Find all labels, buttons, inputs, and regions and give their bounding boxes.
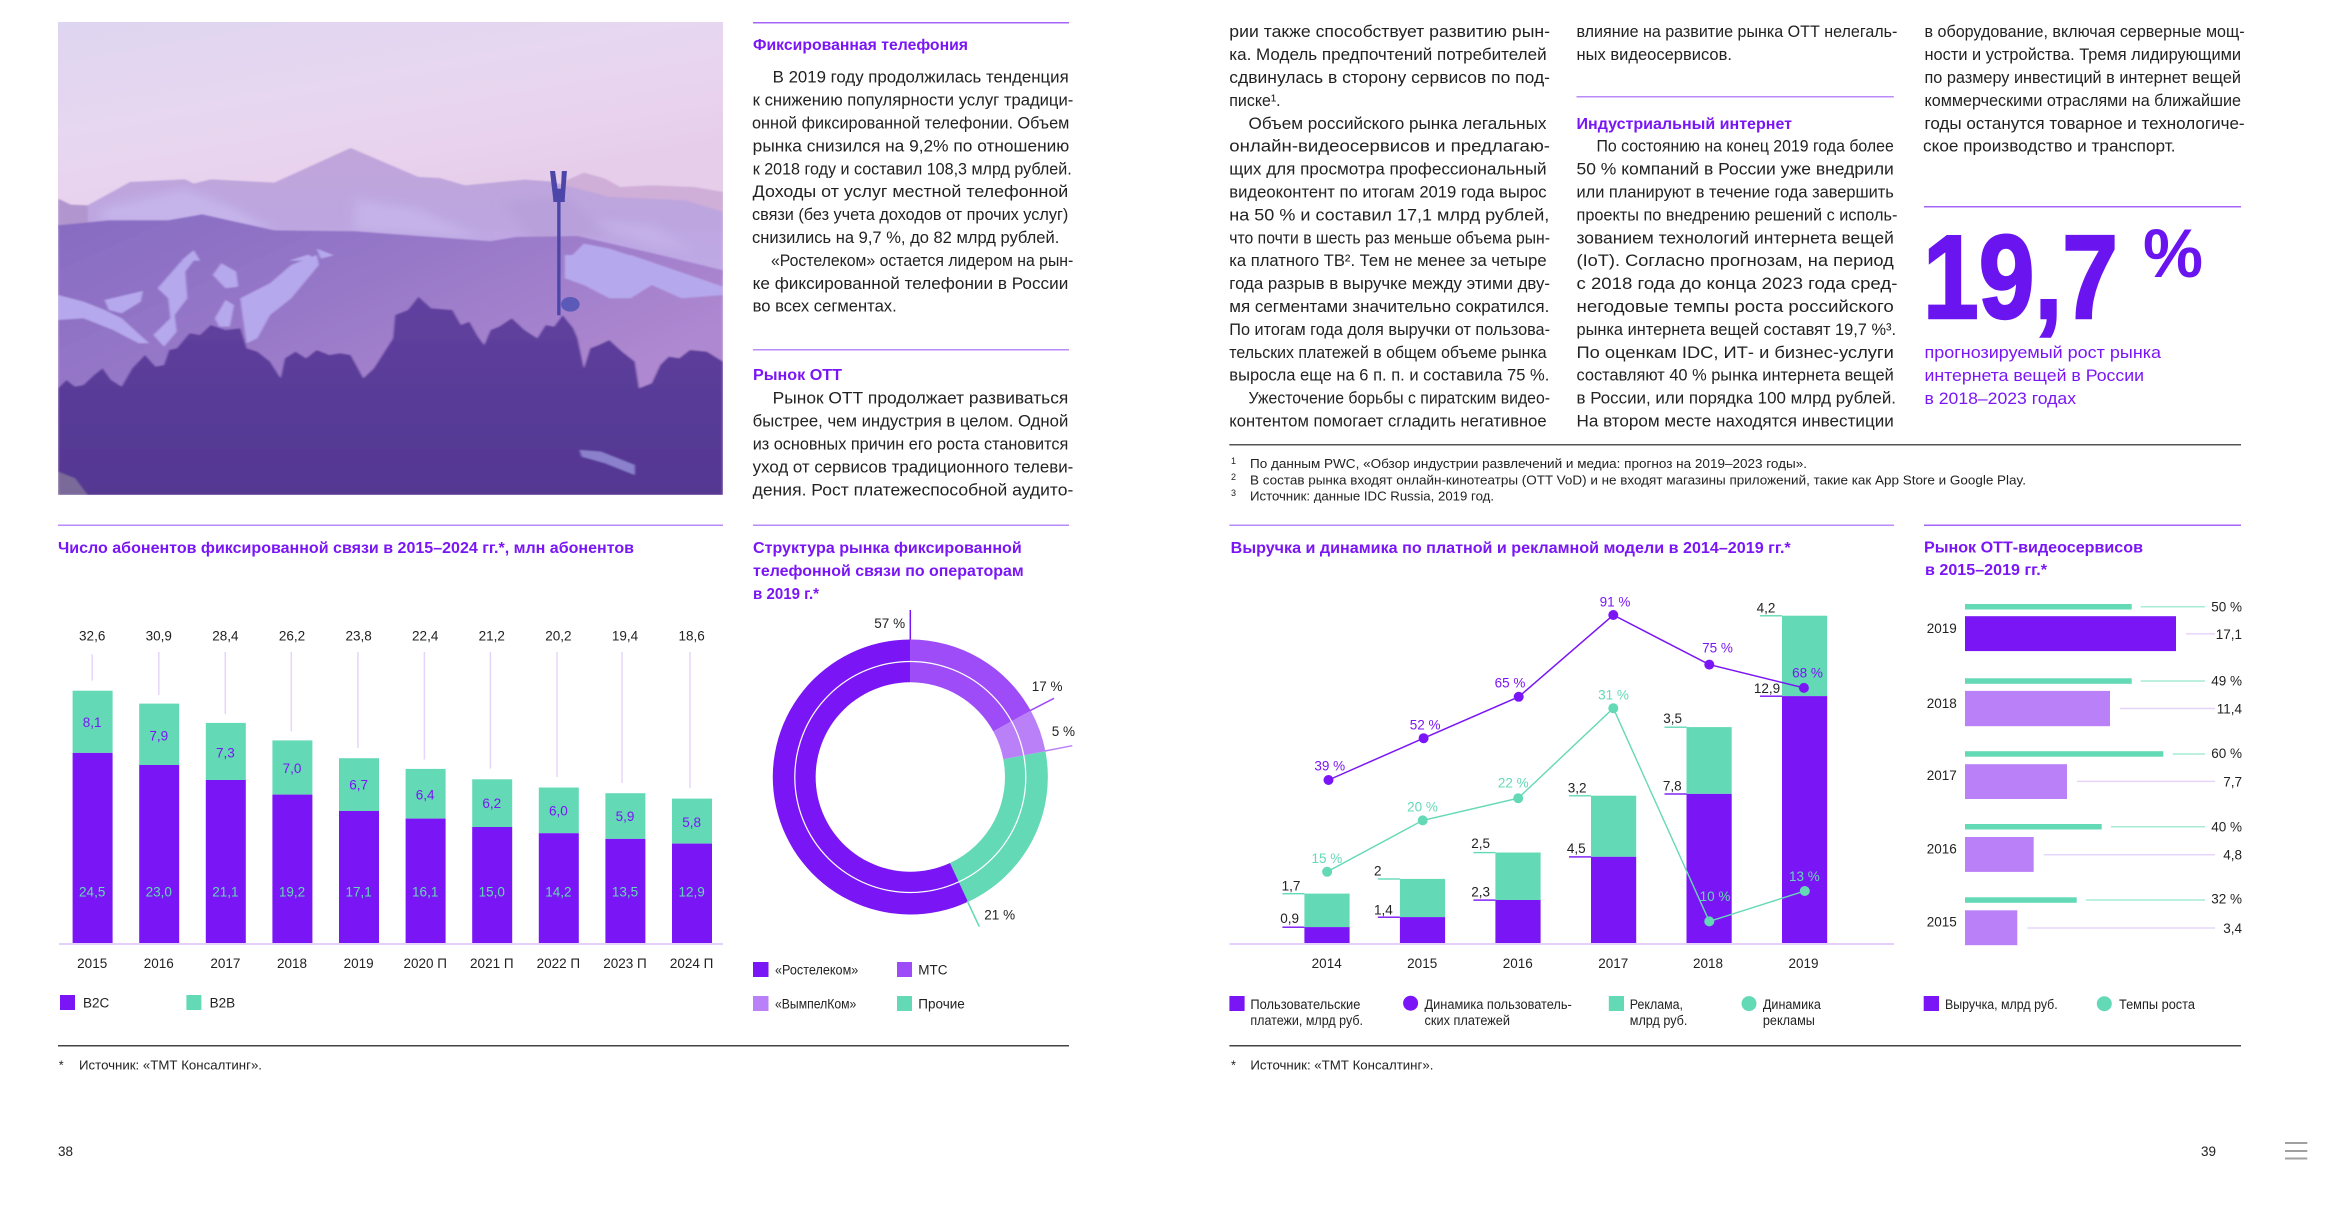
stacked bars: paid and ad revenue: 2 <box>1374 863 1382 878</box>
text block: fixed telephony body <box>752 69 1073 316</box>
text block: column 3: по размеру инвестиций в интернет вещей <box>1924 69 2241 87</box>
text block: column 3: ское производство и транспорт. <box>1923 138 2176 156</box>
donut chart: market share: 5 % <box>1052 724 1075 739</box>
text block: column 1: на 50 % и составил 17,1 млрд рублей, <box>1229 206 1549 224</box>
stacked bars: paid and ad revenue: 1,4 <box>1374 902 1393 917</box>
axis years: 2015 <box>1407 956 1437 971</box>
line chart: ad revenue dynamics: 13 % <box>1789 869 1820 884</box>
text block: column 1: Ужесточение борьбы с пиратским видео- <box>1248 390 1550 408</box>
bar chart: revenue and growth <box>1927 600 2242 945</box>
stacked bar chart: subscribers: 2017 <box>210 956 240 971</box>
text block: column 1: ка. Модель предпочтений потребителей <box>1229 46 1547 64</box>
stacked bar chart: subscribers: 2015 <box>77 956 107 971</box>
stacked bar chart: subscribers: 5,9 <box>616 809 634 824</box>
stacked bar chart: subscribers: 7,3 <box>216 746 235 760</box>
text block: column 1: видеоконтент по итогам 2019 года вырос <box>1229 184 1547 202</box>
stacked bar chart: subscribers: 2022 П <box>537 956 580 971</box>
text block: fixed telephony body: связи (без учета доходов от прочих услуг) <box>752 206 1068 224</box>
axis years <box>1312 956 1819 971</box>
text block: fixed telephony body: ке фиксированной телефонии в России <box>753 275 1068 293</box>
bar chart: revenue and growth: 49 % <box>2211 673 2242 688</box>
stacked bar chart: subscribers: 13,5 <box>612 884 638 899</box>
panel: fixed line subscribers chart <box>58 524 723 1010</box>
text block: column 2 top: ных видеосервисов. <box>1576 46 1732 64</box>
legend: revenue chart: млрд руб. <box>1630 1013 1687 1028</box>
source note: right page: * <box>1231 1058 1236 1072</box>
text block: fixed telephony body: к 2018 году и составил 108,3 млрд рублей. <box>753 160 1072 178</box>
legend: revenue chart: Динамика <box>1763 997 1821 1012</box>
text block: column 1: По итогам года доля выручки от пользова- <box>1229 321 1550 339</box>
donut chart: market share: 17 % <box>1032 679 1062 694</box>
stacked bar chart: subscribers: 2020 П <box>403 956 447 971</box>
legend: revenue chart: ских платежей <box>1424 1013 1510 1028</box>
text block: footnotes: По данным PWC, «Обзор индустрии развлечений и медиа: прогноз на 2019–2023 годы». <box>1250 457 1807 471</box>
text block: fixed telephony body: «Ростелеком» остается лидером на рын- <box>771 252 1073 270</box>
stacked bar chart: subscribers: 8,1 <box>83 715 102 730</box>
text block: column 2 body: проекты по внедрению решений с исполь- <box>1576 206 1897 224</box>
axis years: 2014 <box>1312 956 1342 971</box>
stacked bar chart: subscribers: 28,4 <box>212 628 239 643</box>
text block: column 3: коммерческими отраслями на ближайшие <box>1924 92 2241 110</box>
text block: column 2 top: влияние на развитие рынка ОТТ нелегаль- <box>1576 23 1897 41</box>
line chart: paid revenue dynamics: 52 % <box>1410 717 1440 732</box>
panel: operator structure donut <box>753 524 1075 1012</box>
stacked bar chart: subscribers: 23,8 <box>345 628 372 643</box>
stacked bar chart: subscribers: 7,0 <box>283 761 301 776</box>
bar chart: revenue and growth: 3,4 <box>2223 921 2242 936</box>
page number 38: 38 <box>58 1144 73 1159</box>
text block: fixed telephony body: В 2019 году продолжилась тенденция <box>773 69 1069 87</box>
text block: OTT market body: из основных причин его роста становится <box>753 436 1068 454</box>
text block: callout caption: прогнозируемый рост рынка <box>1924 344 2162 362</box>
stacked bar chart: subscribers: 2018 <box>277 956 307 971</box>
line chart: ad revenue dynamics: 15 % <box>1312 851 1342 866</box>
heading: revenue chart title: Выручка и динамика по платной и рекламной модели в 2014–2019 гг.* <box>1231 540 1791 557</box>
bar chart: revenue and growth: 7,7 <box>2223 774 2242 789</box>
line chart: paid revenue dynamics <box>1314 594 1823 785</box>
text block: column 1: мя сегментами значительно сократился. <box>1229 298 1549 316</box>
bar chart: revenue and growth: 2019 <box>1927 621 1957 636</box>
text block: column 1: сдвинулась в сторону сервисов по под- <box>1229 69 1550 87</box>
stacked bar chart: subscribers: 6,2 <box>482 796 501 811</box>
stacked bars: paid and ad revenue: 4,5 <box>1567 841 1586 856</box>
bar chart: revenue and growth: 11,4 <box>2217 702 2242 716</box>
stacked bar chart: subscribers: 17,1 <box>345 884 372 899</box>
line chart: paid revenue dynamics: 91 % <box>1600 594 1630 609</box>
stacked bar chart: subscribers: 14,2 <box>545 884 572 899</box>
line chart: ad revenue dynamics: 22 % <box>1498 776 1529 790</box>
donut chart: market share: 57 % <box>874 616 905 631</box>
donut chart: market share <box>773 610 1075 927</box>
text block: fixed telephony body: снизились на 9,7 %, до 82 млрд рублей. <box>752 229 1059 247</box>
heading: donut title <box>753 540 1024 603</box>
legend: operators: «ВымпелКом» <box>775 997 856 1012</box>
text block: fixed telephony body: во всех сегментах. <box>753 298 897 316</box>
line chart: ad revenue dynamics: 10 % <box>1700 889 1730 904</box>
heading: OTT chart title: Рынок ОТТ-видеосервисов <box>1924 540 2143 556</box>
text block: OTT market body: Рынок ОТТ продолжает развиваться <box>773 390 1068 408</box>
text block: footnotes: Источник: данные IDC Russia, 2019 год. <box>1250 490 1494 504</box>
legend: OTT chart: Темпы роста <box>2119 997 2195 1012</box>
heading: OTT chart title <box>1924 540 2143 579</box>
text block: OTT market body: дения. Рост платежеспособной аудито- <box>753 481 1073 499</box>
icon: telecom tower <box>550 171 580 315</box>
stacked bar chart: subscribers: 5,8 <box>682 815 701 830</box>
stacked bars: paid and ad revenue: 4,2 <box>1757 600 1775 616</box>
line chart: ad revenue dynamics <box>1312 687 1820 926</box>
donut chart: market share: 21 % <box>984 907 1015 922</box>
trees silhouette <box>58 297 723 495</box>
text block: column 1: щих для просмотра профессиональный <box>1229 161 1547 179</box>
stacked bar chart: subscribers: 16,1 <box>412 884 438 899</box>
stacked bars: paid and ad revenue: 12,9 <box>1754 681 1780 696</box>
text block: column 2 body: По состоянию на конец 2019 года более <box>1596 138 1894 156</box>
text block: footnotes: 1 <box>1231 456 1236 466</box>
line chart: paid revenue dynamics: 65 % <box>1495 676 1525 690</box>
text block: column 1: выросла еще на 6 п. п. и составила 75 %. <box>1229 367 1549 385</box>
stacked bar chart: subscribers: 2024 П <box>670 956 713 971</box>
heading: subscribers chart title: Число абонентов фиксированной связи в 2015–2024 гг.*, млн абонентов <box>58 540 634 557</box>
line chart: paid revenue dynamics: 75 % <box>1702 640 1733 656</box>
text block: column 2 top <box>1576 23 1897 64</box>
text block: fixed telephony body: к снижению популярности услуг традици- <box>753 92 1073 110</box>
source note: right page: Источник: «ТМТ Консалтинг». <box>1250 1058 1433 1072</box>
stacked bars: paid and ad revenue <box>1229 600 1894 945</box>
bar chart: revenue and growth: 4,8 <box>2223 848 2242 863</box>
stacked bar chart: subscribers: 30,9 <box>146 628 172 643</box>
heading: donut title: в 2019 г.* <box>753 586 820 603</box>
stacked bars: paid and ad revenue: 1,7 <box>1282 879 1300 894</box>
axis years: 2018 <box>1693 956 1723 971</box>
heading: OTT market: Рынок ОТТ <box>753 367 842 384</box>
text block: fixed telephony body: онной фиксированной телефонии. Объем <box>752 114 1069 132</box>
text block: footnotes: 2 <box>1231 472 1236 482</box>
stacked bar chart: subscribers: 26,2 <box>279 628 305 643</box>
text block: fixed telephony body: Доходы от услуг местной телефонной <box>753 183 1068 201</box>
bar chart: revenue and growth: 2016 <box>1927 842 1957 856</box>
source note: right page <box>1229 1045 2241 1072</box>
text block: column 1: года разрыв в выручке между этими дву- <box>1229 275 1550 293</box>
source note: left page: * <box>59 1058 64 1072</box>
callout: 19,7 %: 19,7 <box>1923 211 2118 344</box>
panel: photo of mountains with telecom tower <box>58 22 723 495</box>
text block: column 1: писке¹. <box>1229 92 1281 110</box>
bar chart: revenue and growth: 2018 <box>1927 696 1957 711</box>
text block: column 2 body: или планируют в течение года завершить <box>1576 184 1894 202</box>
stacked bar chart: subscribers: 7,9 <box>149 728 168 743</box>
bar chart: revenue and growth: 2017 <box>1927 768 1957 783</box>
legend: operators: Прочие <box>918 997 965 1012</box>
text block: column 2 body: По оценкам IDC, ИТ- и бизнес-услуги <box>1576 344 1894 362</box>
text block: column 2 body: рынка интернета вещей составят 19,7 %³. <box>1576 321 1896 339</box>
stacked bar chart: subscribers: 12,9 <box>678 884 705 899</box>
line chart: paid revenue dynamics: 68 % <box>1792 666 1823 680</box>
stacked bar chart: subscribers: 21,2 <box>479 628 505 643</box>
text block: column 3: годы останутся товарное и технологиче- <box>1924 115 2245 133</box>
stacked bar chart: subscribers: 23,0 <box>146 884 172 899</box>
text block: column 2 body: с 2018 года до конца 2023 года сред- <box>1576 275 1897 293</box>
stacked bar chart: subscribers: 6,4 <box>416 787 435 802</box>
legend: OTT chart <box>1924 996 2195 1012</box>
legend: operators <box>753 962 965 1012</box>
text block: column 3: в оборудование, включая серверные мощ- <box>1924 23 2245 41</box>
panel: fixed telephony text <box>752 22 1073 499</box>
axis years: 2019 <box>1788 956 1819 971</box>
text block: column 2 body: (IoT). Согласно прогнозам, на период <box>1576 252 1894 270</box>
text block: column 3: ности и устройства. Тремя лидирующими <box>1924 46 2241 64</box>
stacked bar chart: subscribers: 15,0 <box>479 884 505 899</box>
panel: revenue and dynamics chart <box>1229 524 1894 1028</box>
heading: fixed telephony: Фиксированная телефония <box>753 37 968 54</box>
text block: OTT market body: уход от сервисов традиционного телеви- <box>753 458 1073 476</box>
stacked bar chart: subscribers: 19,4 <box>612 628 639 643</box>
line chart: ad revenue dynamics: 31 % <box>1598 687 1629 702</box>
legend: operators: «Ростелеком» <box>775 963 858 978</box>
text block: column 2 body: составляют 40 % рынка интернета вещей <box>1576 367 1894 385</box>
stacked bar chart: subscribers: 2016 <box>144 956 174 971</box>
text block: column 1: контентом помогает сгладить негативное <box>1229 412 1547 430</box>
legend: revenue chart: платежи, млрд руб. <box>1250 1013 1363 1028</box>
legend: revenue chart: рекламы <box>1763 1013 1815 1028</box>
text block: footnotes: 3 <box>1231 488 1236 498</box>
text block: column 1: Объем российского рынка легальных <box>1248 115 1547 133</box>
text block: column 3 <box>1923 23 2245 156</box>
bar chart: revenue and growth: 50 % <box>2211 600 2242 614</box>
text block: footnotes <box>1231 456 2026 504</box>
legend: revenue chart: Пользовательские <box>1250 997 1360 1012</box>
stacked bars: paid and ad revenue: 3,2 <box>1568 780 1587 796</box>
text block: callout caption <box>1924 344 2162 408</box>
axis years: 2017 <box>1598 956 1628 971</box>
bar chart: revenue and growth: 32 % <box>2211 891 2242 906</box>
text block: column 1: что почти в шесть раз меньше объема рын- <box>1229 229 1550 247</box>
stacked bars: paid and ad revenue: 7,8 <box>1663 779 1682 794</box>
text block: column 1: рии также способствует развитию рын- <box>1229 23 1550 41</box>
text block: column 1: ка платного ТВ². Тем не менее за четыре <box>1229 252 1547 270</box>
stacked bars: paid and ad revenue: 3,5 <box>1663 711 1682 726</box>
source note: left page: Источник: «ТМТ Консалтинг». <box>79 1058 262 1072</box>
stacked bars: paid and ad revenue: 2,3 <box>1471 884 1490 899</box>
heading: donut title: телефонной связи по операторам <box>753 563 1024 580</box>
text block: column 2 body <box>1576 138 1897 430</box>
legend: B2C and B2B: B2C <box>83 996 110 1010</box>
stacked bars: paid and ad revenue: 0,9 <box>1280 911 1299 926</box>
stacked bar chart: subscribers: 24,5 <box>79 884 105 899</box>
stacked bar chart: subscribers: 21,1 <box>212 884 239 899</box>
text block: column 2 body: зованием технологий интернета вещей <box>1576 229 1894 247</box>
callout: 19,7 %: % <box>2143 215 2203 292</box>
heading: OTT chart title: в 2015–2019 гг.* <box>1925 562 2048 579</box>
legend: revenue chart: Динамика пользователь- <box>1424 997 1572 1012</box>
text block: column 1: тельских платежей в общем объеме рынка <box>1229 344 1547 362</box>
heading: industrial internet: Индустриальный интернет <box>1576 116 1792 133</box>
text block: column 1 <box>1229 23 1550 430</box>
stacked bar chart: subscribers <box>59 628 723 971</box>
panel: OTT video services chart <box>1924 524 2242 1012</box>
stacked bar chart: subscribers: 6,0 <box>549 803 568 818</box>
text block: callout caption: в 2018–2023 годах <box>1924 390 2077 408</box>
legend: OTT chart: Выручка, млрд руб. <box>1945 997 2058 1012</box>
bar chart: revenue and growth: 60 % <box>2211 746 2242 761</box>
legend: revenue chart: Реклама, <box>1630 997 1683 1012</box>
bar chart: revenue and growth: 17,1 <box>2216 627 2242 642</box>
source note: left page <box>58 1045 1069 1072</box>
text block: column 2 body: в России, или порядка 100 млрд рублей. <box>1576 390 1896 408</box>
stacked bars: paid and ad revenue: 2,5 <box>1471 836 1490 851</box>
page number 39: 39 <box>2201 1144 2216 1159</box>
stacked bar chart: subscribers: 20,2 <box>545 628 572 643</box>
stacked bar chart: subscribers: 2023 П <box>603 956 647 971</box>
stacked bar chart: subscribers: 18,6 <box>678 628 705 643</box>
stacked bar chart: subscribers: 22,4 <box>412 628 439 643</box>
bar chart: revenue and growth: 2015 <box>1927 914 1957 929</box>
text block: column 1: онлайн-видеосервисов и предлагаю- <box>1229 138 1550 156</box>
line chart: paid revenue dynamics: 39 % <box>1314 758 1345 773</box>
text block: column 2 body: негодовые темпы роста российского <box>1576 298 1894 316</box>
heading: donut title: Структура рынка фиксированной <box>753 540 1022 557</box>
text block: column 2 body: На втором месте находятся инвестиции <box>1576 412 1894 430</box>
axis years: 2016 <box>1503 956 1533 971</box>
legend: B2C and B2B <box>60 995 235 1010</box>
icon: menu <box>2285 1142 2307 1160</box>
panel: right page text columns <box>1229 23 2245 503</box>
legend: revenue chart <box>1229 996 1821 1028</box>
text block: column 2 body: 50 % компаний в России уже внедрили <box>1576 161 1894 179</box>
legend: B2C and B2B: B2B <box>210 996 235 1010</box>
stacked bar chart: subscribers: 2021 П <box>470 956 514 971</box>
stacked bar chart: subscribers: 32,6 <box>79 628 105 643</box>
text block: OTT market body <box>753 390 1073 499</box>
line chart: ad revenue dynamics: 20 % <box>1407 799 1438 814</box>
stacked bar chart: subscribers: 19,2 <box>279 884 305 899</box>
text block: fixed telephony body: рынка снизился на 9,2% по отношению <box>753 137 1069 155</box>
text block: OTT market body: быстрее, чем индустрия в целом. Одной <box>753 413 1068 431</box>
stacked bar chart: subscribers: 2019 <box>344 956 374 971</box>
legend: operators: МТС <box>918 963 948 978</box>
text block: footnotes: В состав рынка входят онлайн-кинотеатры (OTT VoD) и не входят магазины приложений, такие как App Store и Google Play. <box>1250 474 2026 488</box>
bar chart: revenue and growth: 40 % <box>2211 819 2242 834</box>
text block: callout caption: интернета вещей в России <box>1924 367 2144 385</box>
stacked bar chart: subscribers: 6,7 <box>349 777 368 792</box>
